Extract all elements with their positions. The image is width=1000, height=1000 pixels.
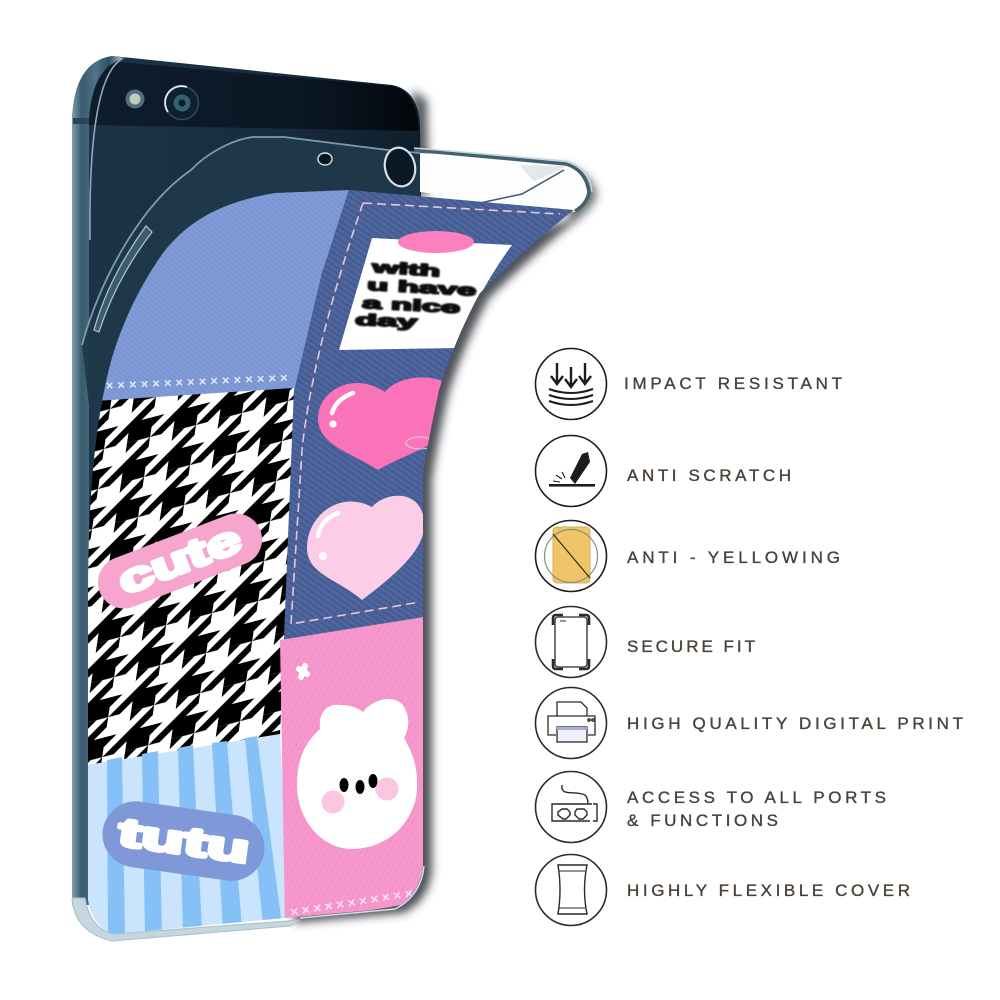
label: IMPACT RESISTANT [624, 374, 842, 393]
phone flash [126, 90, 144, 108]
cute label [98, 514, 262, 608]
cute label: cute [112, 517, 247, 604]
feature: access to all ports [536, 772, 886, 842]
panel: light denim [101, 190, 349, 407]
case clear corner [420, 153, 589, 212]
icon: ports [536, 772, 606, 842]
note card [339, 231, 512, 350]
label: HIGHLY FLEXIBLE COVER [627, 881, 910, 900]
phone metal frame [72, 56, 125, 905]
pink tape [398, 231, 474, 253]
case mic hole [318, 153, 332, 165]
icon: yellowing [536, 520, 606, 592]
case camera hole [381, 145, 419, 189]
note text: day [355, 312, 418, 331]
printed case artwork [88, 190, 608, 934]
note text: u have [367, 277, 477, 300]
panel: houndstooth [80, 388, 294, 768]
panel: blue stripes [80, 734, 290, 945]
label: SECURE FIT [627, 637, 755, 656]
icon: printer [536, 688, 606, 758]
tutu label: tutu [116, 810, 252, 872]
feature: anti scratch [536, 436, 791, 506]
icon: impact [536, 348, 606, 420]
feature: highly flexible cover [536, 854, 910, 926]
tutu label [102, 801, 264, 881]
icon: flexible [536, 854, 606, 926]
case side button [94, 226, 152, 332]
phone camera lens [165, 86, 198, 120]
panel: pink bunny [280, 616, 430, 925]
phone back [72, 56, 421, 905]
label line 2: & FUNCTIONS [627, 811, 778, 830]
panel: phone product illustration [60, 56, 600, 945]
note text: a nice [362, 295, 461, 317]
denim stitching [291, 203, 560, 624]
case corner rim [300, 866, 424, 918]
sparkle [299, 666, 307, 677]
feature: high quality digital print [536, 688, 963, 758]
drop shadow [294, 90, 597, 923]
label: ANTI SCRATCH [627, 466, 791, 485]
panel: dark denim [284, 190, 574, 640]
light pink heart [307, 496, 424, 600]
cross stitch pink: ××××××××××× [289, 885, 414, 920]
pink heart [318, 377, 455, 470]
cross stitch row: ×××××××××××××××× [105, 370, 288, 393]
label: HIGH QUALITY DIGITAL PRINT [627, 714, 963, 733]
label: ANTI - YELLOWING [627, 548, 840, 567]
label line 1: ACCESS TO ALL PORTS [627, 788, 886, 807]
case lower rim [72, 898, 300, 941]
note text [355, 259, 477, 331]
feature: impact resistant [536, 348, 842, 420]
icon: scratch [536, 436, 606, 506]
clear case [72, 137, 592, 941]
icon: secure fit [536, 606, 606, 678]
feature: anti yellowing [536, 520, 840, 592]
feature: secure fit [536, 606, 755, 678]
bunny [297, 699, 417, 849]
note text: with [370, 259, 441, 281]
